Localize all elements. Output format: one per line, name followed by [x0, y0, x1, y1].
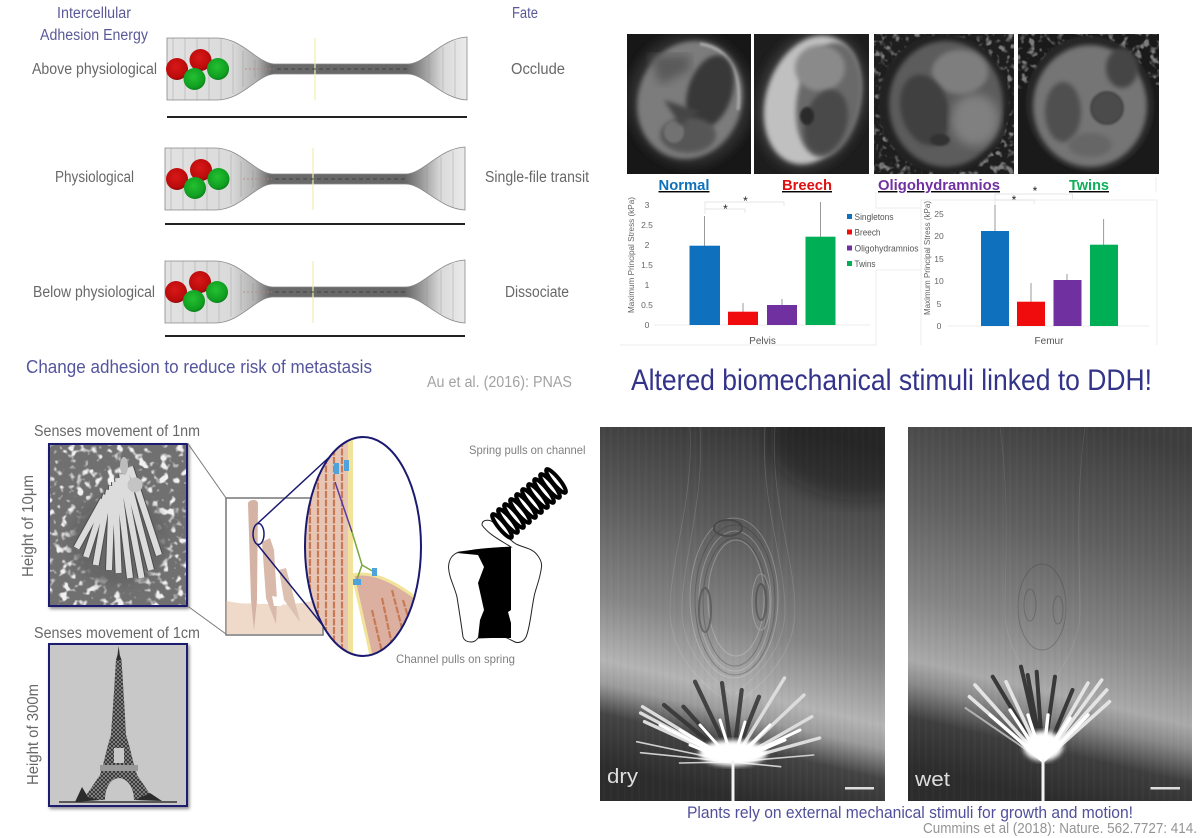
y axis ticks: 2 [645, 240, 650, 250]
MRI: twins [1018, 34, 1159, 174]
icon: hair cell with spring [448, 467, 568, 642]
label: normal: Normal [658, 178, 710, 194]
panel: hair cell scale comparison [20, 423, 586, 806]
label: dry: dry [607, 766, 638, 788]
label: dissociate: Dissociate [505, 284, 569, 301]
vortex wet [1018, 564, 1066, 650]
label: above physiological: Above physiological [32, 61, 157, 78]
channel simulation: above physiological [166, 37, 467, 118]
bar chart: femur [922, 184, 1149, 347]
legend [847, 212, 919, 269]
bars [981, 231, 1118, 326]
heading: fate: Fate [512, 5, 538, 22]
vortex dry [690, 518, 778, 678]
y axis ticks: 10 [934, 276, 944, 286]
y axis ticks: 5 [937, 299, 942, 309]
condition labels [658, 178, 1109, 194]
error bars [704, 202, 820, 312]
y axis ticks [934, 209, 944, 331]
scale bar [845, 787, 874, 790]
label: oligohydramnios: Oligohydramnios [878, 178, 1000, 194]
label: height of 300m: Height of 300m [25, 684, 42, 785]
y axis ticks [641, 200, 653, 330]
category label: Pelvis [749, 336, 776, 347]
conclusion: change adhesion: Change adhesion to reduce risk of metastasis [26, 356, 372, 377]
significance brackets [995, 184, 1073, 207]
significance brackets: * [743, 194, 748, 208]
legend: Singletons [854, 212, 894, 222]
connector lines to inset [188, 443, 226, 634]
zoom lines to oval [257, 450, 337, 643]
y axis ticks: 20 [934, 231, 944, 241]
y axis ticks: 1.5 [641, 260, 653, 270]
label: channel pulls on spring: Channel pulls on spring [396, 652, 515, 666]
heading: intercellular adhesion energy [40, 5, 148, 44]
photo background: dry [600, 427, 885, 801]
y axis ticks: 1 [645, 280, 650, 290]
heading: intercellular adhesion energy: Adhesion Energy [40, 27, 148, 44]
label: physiological: Physiological [55, 169, 134, 186]
panel: dandelion seed in dry air [600, 427, 885, 801]
y axis ticks: 2.5 [641, 220, 653, 230]
label: breech: Breech [782, 178, 832, 194]
y axis ticks: 0.5 [641, 300, 653, 310]
dry seed head [637, 678, 820, 801]
bars [690, 237, 836, 325]
significance brackets: * [1033, 184, 1038, 198]
streamlines [1000, 427, 1085, 695]
y axis title: Maximum Principal Stress (kPa) [922, 201, 932, 315]
scale bar [1150, 787, 1180, 790]
y axis ticks: 3 [645, 200, 650, 210]
label: occlude: Occlude [511, 61, 565, 78]
channel simulation: physiological [165, 147, 465, 225]
label: senses movement of 1nm: Senses movement of 1nm [34, 423, 200, 440]
label: twins: Twins [1069, 178, 1109, 194]
photo: hair bundle electron micrograph [49, 444, 187, 606]
label: height of 10 micrometres: Height of 10μm [20, 475, 37, 577]
label: senses movement of 1cm: Senses movement of 1cm [34, 625, 200, 642]
error bars [995, 205, 1104, 302]
y axis title: Maximum Principal Stress (kPa) [626, 197, 636, 313]
panel: fetal MRI scans [627, 34, 1159, 193]
y axis ticks: 0 [645, 320, 650, 330]
small zoom marker [253, 524, 264, 544]
label: wet: wet [914, 769, 950, 791]
streamlines [670, 427, 795, 702]
bar chart: pelvis [626, 194, 919, 347]
illustration: tip link close-up [300, 430, 425, 660]
label: below physiological: Below physiological [33, 284, 155, 301]
caption: plants rely on mechanical stimuli: Plants rely on external mechanical stimuli for growth and motion! [687, 803, 1133, 822]
MRI: normal [627, 34, 751, 174]
y axis ticks: 15 [934, 254, 944, 264]
heading: intercellular adhesion energy: Intercellular [57, 5, 131, 22]
legend: Twins [854, 259, 876, 269]
MRI: breech [754, 34, 869, 174]
significance brackets [705, 194, 784, 216]
significance brackets: * [1012, 193, 1017, 207]
category label: Femur [1035, 336, 1064, 347]
panel: adhesion energy and cell fate [26, 5, 590, 391]
label: spring pulls on channel: Spring pulls on channel [469, 443, 586, 457]
citation: Au et al: Au et al. (2016): PNAS [427, 374, 572, 391]
photo: Eiffel Tower [49, 644, 187, 806]
label: single-file transit: Single-file transit [485, 169, 590, 186]
channel simulation: below physiological [165, 260, 465, 337]
significance brackets: * [723, 202, 728, 216]
legend: Breech [854, 228, 880, 238]
y axis ticks: 0 [937, 321, 942, 331]
panel: dandelion seed in wet air [908, 427, 1192, 801]
MRI: oligohydramnios [874, 34, 1014, 174]
legend: Oligohydramnios [854, 244, 919, 254]
y axis ticks: 25 [934, 209, 944, 219]
wet seed head [966, 667, 1110, 801]
illustration: stereocilia inset [226, 498, 323, 635]
photo background: wet [908, 427, 1192, 801]
